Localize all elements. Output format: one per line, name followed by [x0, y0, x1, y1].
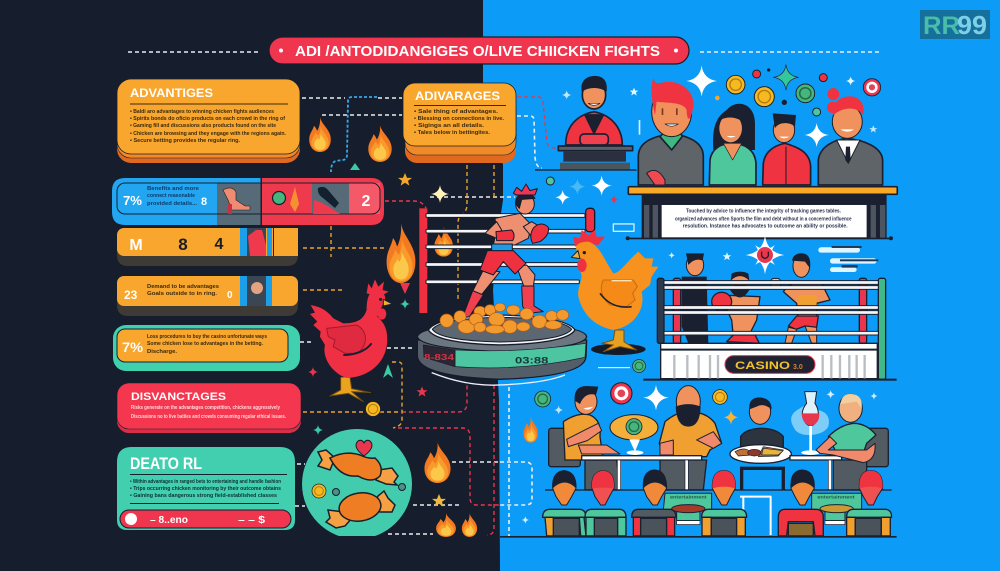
lower drumstick [372, 491, 395, 512]
bullet list: • Gaining bans dangerous strong field-established classes [130, 493, 277, 499]
coins [546, 68, 881, 185]
stat bar: 23 [117, 276, 298, 316]
heading: DEATO RL [130, 454, 202, 473]
description: Demand to be advantages [147, 284, 219, 290]
value M: M [129, 237, 143, 254]
ring posts [657, 278, 886, 379]
judges sign text [675, 209, 852, 230]
bullet list [130, 479, 281, 499]
red status bar [120, 510, 291, 528]
icon: boxing glove [223, 188, 250, 214]
stat: 7%: 7% [123, 193, 142, 208]
orange chicken [571, 230, 658, 355]
title text: ADI /ANTODIDANGIGES O/LIVE CHIICKEN FIGHTS [295, 43, 660, 60]
ring ropes [664, 281, 878, 335]
casino sign text: CASINO [735, 360, 791, 372]
bullet list: • Secure betting provides the regular ring. [130, 138, 241, 144]
status values: – 8..eno [150, 515, 188, 526]
white line near chicken [598, 367, 630, 368]
bullet list: • Trips occurring chicken monitoring by their outcome obtains [130, 486, 281, 492]
arm and gloves [485, 222, 502, 238]
icon: green chip and flame [272, 187, 299, 212]
stat text [147, 186, 199, 207]
host at podium [535, 77, 637, 171]
stat bar: teal 7% [113, 325, 300, 371]
judges sign text: organized advances often Sports the film and debt without in a concerned influence [675, 216, 852, 222]
front row spectators [553, 470, 883, 505]
crown [513, 184, 537, 195]
heading: ADVANTIGES [130, 86, 213, 100]
table labels [670, 494, 855, 499]
wine glass [791, 392, 829, 455]
heading: ADIVARAGES [415, 91, 500, 103]
left man [549, 386, 620, 490]
title banner [269, 37, 689, 64]
panel: advantages 2 [403, 83, 516, 163]
strip label: 03:88 [515, 355, 548, 365]
judge: man in suit [818, 88, 883, 185]
description [147, 334, 267, 355]
stat text: connect reasonable [147, 193, 195, 199]
description [147, 284, 219, 297]
flames: lower center [424, 442, 477, 537]
comb [367, 279, 389, 297]
podium [558, 146, 633, 151]
icon: microphone stand shadow [313, 200, 340, 214]
bearded boxer [712, 272, 760, 343]
bullet list [414, 109, 505, 136]
flame: upper left [309, 117, 331, 152]
bullet list: • Gaming fill and discussions also products found on the site [130, 123, 276, 129]
heart [356, 440, 372, 456]
small arrow under flame [400, 283, 410, 294]
icon: microphone [318, 187, 339, 208]
bowl highlight [432, 373, 565, 385]
value 8: 8 [178, 235, 188, 254]
green tables [663, 493, 862, 535]
coin on line [366, 402, 380, 416]
coins and chips [522, 383, 878, 524]
judge: woman [709, 104, 756, 185]
nugget bowl [417, 303, 587, 385]
red chicken [310, 279, 393, 402]
stat bar: blue and red [112, 178, 384, 225]
torso [493, 213, 532, 245]
table labels: entertainment [817, 494, 855, 499]
red shorts boxer [771, 253, 830, 343]
nuggets [440, 303, 569, 334]
comb [573, 230, 605, 247]
value 4: 4 [215, 236, 224, 253]
red display text: 8-834 [424, 353, 455, 362]
ring post right [586, 208, 595, 232]
bearded man [659, 386, 722, 490]
stat text: Benefits and more [147, 186, 199, 192]
bullet list: • Sale thing of advantages. [414, 109, 499, 115]
coin [312, 484, 326, 498]
stat text: provided details... [147, 201, 198, 207]
bullet list: • Sigings an all details. [414, 123, 485, 129]
center man [740, 397, 785, 490]
flame [523, 417, 538, 443]
audience [500, 383, 897, 538]
flame on ring [434, 227, 453, 257]
description: Discharge. [147, 349, 178, 355]
chip dots [332, 484, 406, 496]
body [310, 290, 387, 378]
legs [330, 377, 371, 402]
sparkles [555, 65, 877, 231]
judges sign text: Touched by advice to influence the integrity of tracking games tables. [686, 209, 841, 215]
panel: deato rl [117, 447, 295, 530]
casino sign number: 3.0 [793, 364, 803, 371]
table right [790, 456, 842, 490]
judges table [626, 187, 897, 240]
bullet list: • Within advantages in ranged bets to entertaining and handle fashion [130, 479, 281, 485]
value 23: 23 [124, 288, 138, 302]
flame: large [387, 223, 415, 283]
boxer [463, 184, 549, 318]
shadow [591, 344, 646, 355]
value 0: 0 [227, 290, 233, 301]
center food plate [730, 445, 791, 463]
bullet list: • Baldi aro advantages to winning chicken fights audiences [130, 109, 274, 115]
upper drumstick [318, 450, 398, 528]
logo: RR99 [920, 10, 990, 40]
coin near chicken [632, 360, 646, 372]
center boxing ring and boxer [419, 184, 595, 318]
stat: 8: 8 [201, 196, 207, 208]
panel: disadvantages [117, 383, 301, 433]
flame: upper right [368, 125, 392, 162]
judge: man in red shirt [763, 113, 811, 185]
panel: advantages 1 [117, 79, 300, 163]
description: Some chicken lose to advantages in the betting. [147, 341, 264, 347]
stat: 2: 2 [362, 193, 371, 210]
bullet list: • Spirits bonds do oficio products on each crowd in the ring of [130, 116, 285, 122]
plate: chicken wings [302, 429, 412, 539]
decorative stars [308, 163, 449, 507]
ring post left [419, 208, 427, 313]
shorts [480, 251, 526, 275]
ring ropes [426, 214, 585, 284]
second boxing ring [643, 253, 897, 381]
logo: RR99: 99 [957, 10, 987, 40]
speech plate [610, 415, 658, 455]
red display [423, 345, 455, 367]
logo: RR99: RR [923, 12, 960, 40]
referee [682, 253, 708, 343]
legs [472, 270, 500, 297]
bullet list: • Tales below in bettingites. [414, 130, 491, 136]
front row chairs [543, 509, 892, 536]
wing [327, 325, 365, 353]
stat bar: M 8 4 [117, 228, 298, 266]
beak and wattle [571, 251, 580, 259]
judges section [535, 65, 897, 275]
panel: deato rl: – – $ [238, 515, 266, 526]
description: Discussions no to live battles and crowds consuming regular ethical issues. [131, 414, 287, 420]
heading: DISVANCTAGES [131, 391, 226, 403]
description [131, 405, 287, 420]
bullet list: • Chicken are browsing and they engage with the regions again. [130, 131, 287, 137]
ring base [643, 343, 897, 381]
bullet list [130, 109, 287, 144]
casino sign [725, 356, 815, 373]
teal display strip [455, 343, 586, 368]
value 7%: 7% [122, 339, 144, 355]
table left [582, 456, 702, 490]
connector lines [128, 52, 882, 537]
judges sign text: resolution. Instance has advocates to outcome an ability or possible. [683, 224, 848, 230]
speech lines [668, 246, 878, 272]
bullet list: • Blessing on connections in live. [414, 116, 505, 122]
right man [816, 394, 888, 490]
judges sign [662, 205, 867, 237]
description: Risks generate on the advantages competition, chickens aggressively [131, 405, 280, 411]
table labels: entertainment [670, 494, 707, 499]
rail line [545, 489, 892, 491]
floor line [500, 536, 897, 538]
legs [602, 330, 637, 352]
head [516, 194, 534, 214]
background: dark side [0, 0, 503, 571]
description: Goals outside to in ring. [147, 291, 218, 297]
wing [601, 280, 637, 307]
description: Loss procedures to buy the casino unfortunate ways [147, 334, 267, 340]
burst icon [745, 235, 785, 275]
judge: red hair man [638, 78, 703, 185]
beak and wattle [383, 299, 393, 306]
body [576, 242, 658, 330]
